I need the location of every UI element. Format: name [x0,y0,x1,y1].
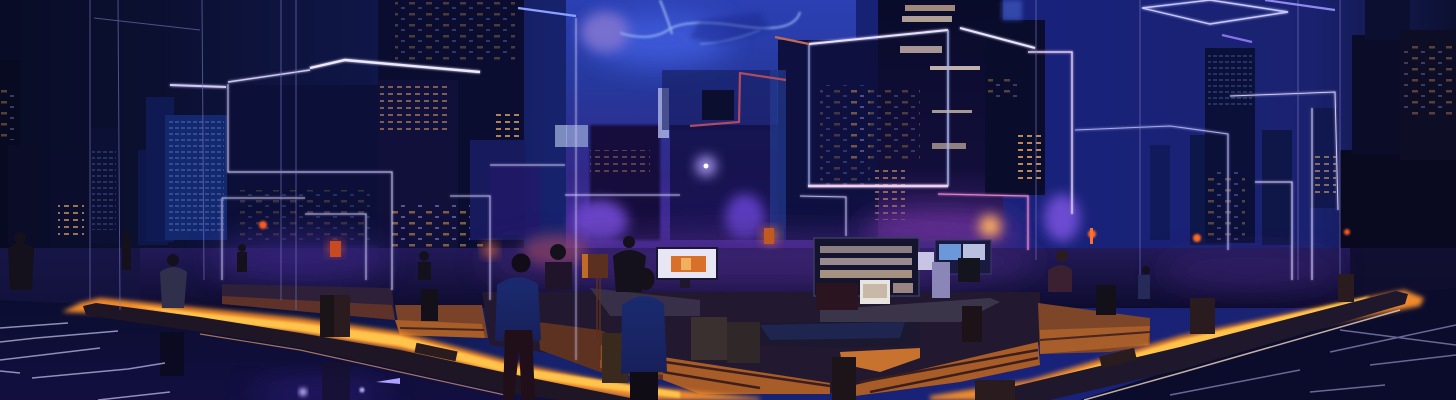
person: foreground left [495,254,541,400]
central desks [222,284,1150,396]
monitor: orange image screen [656,247,718,288]
tall glass verticals [90,0,1340,310]
skyline: right buildings [1150,0,1456,250]
dark platform rail: left [83,303,640,400]
foreground reflective floor: right [1080,288,1456,400]
neon accent bars [518,0,1335,126]
warm lamps [259,215,1350,360]
skyline: centre-right towers [770,0,1080,250]
person: foreground right [621,268,667,400]
monitor: thumbnail wall [814,238,919,296]
foreground reflective floor: left [0,300,640,400]
glowing orange platform edge: right [930,290,1424,400]
glass frames with neon edges [170,0,1338,360]
speaker posts along the rail [320,274,1354,400]
skyline: left buildings [0,60,378,250]
people: background operators [8,231,1150,308]
dark platform rail: right [985,291,1408,400]
monitor: blue dashboard [918,240,991,298]
floor behind the deck [0,232,1456,308]
nebula screen [555,0,856,250]
glowing orange platform edge: left [62,298,760,400]
monitors: small foreground screens [421,280,1116,342]
skyline: centre-left tower with lit windows [378,0,540,250]
